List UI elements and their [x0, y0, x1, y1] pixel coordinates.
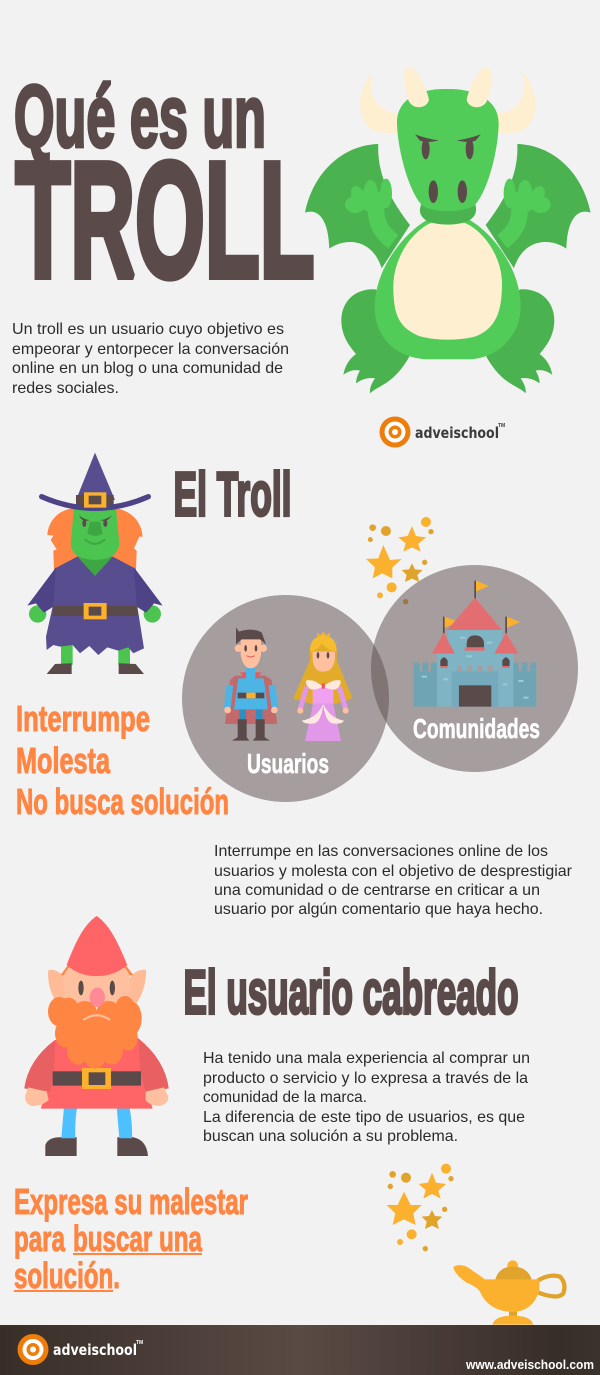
text block: angry user description [203, 1050, 530, 1145]
callout: angry user goal [14, 1181, 248, 1296]
footer [0, 1325, 600, 1375]
text block: troll description: Interrumpe en las conversaciones online de los [214, 843, 548, 860]
text block: intro: online en un blog o una comunidad de [12, 360, 283, 377]
label: Comunidades: Comunidades [413, 713, 540, 744]
text block: angry user description: Ha tenido una mala experiencia al comprar un [203, 1050, 530, 1067]
callout: angry user goal: buscar una [73, 1218, 203, 1259]
icon: gnome angry user [24, 916, 169, 1156]
logo: adveischool footer: adveischool [53, 1341, 137, 1359]
circle: usuarios [182, 595, 389, 802]
icon: prince [224, 627, 278, 741]
circle: comunidades [371, 565, 578, 772]
text block: angry user description: buscan una solución a su problema. [203, 1128, 458, 1145]
logo: adveischool footer [18, 1334, 143, 1365]
title: Qué es un [14, 66, 266, 166]
logo: adveischool top: adveischool [415, 424, 499, 442]
logo: adveischool footer: TM [136, 1340, 143, 1346]
logo: adveischool top: TM [498, 423, 505, 429]
logo: adveischool top [380, 416, 505, 448]
text block: troll description: una comunidad o de centrarse en criticar a un [214, 882, 540, 899]
label: Usuarios: Usuarios [247, 748, 329, 779]
text block: angry user description: producto o servicio y lo expresa a través de la [203, 1070, 528, 1087]
text block: troll description: usuario por algún comentario que haya hecho. [214, 901, 543, 918]
callout: angry user goal: solución. [14, 1255, 120, 1296]
text block: intro: empeorar y entorpecer la conversación [12, 341, 289, 358]
text block: troll description: usuarios y molesta con el objetivo de desprestigiar [214, 863, 573, 880]
icon: castle [414, 581, 536, 707]
callout: angry user goal: Expresa su malestar [14, 1181, 248, 1222]
list: troll traits: Molesta [16, 740, 111, 781]
icon: witch troll [27, 453, 163, 674]
list: troll traits: No busca solución [16, 781, 229, 822]
icon: stars group top [366, 517, 434, 604]
text block: intro [12, 321, 289, 397]
icon: dragon [305, 67, 591, 393]
heading: El Troll: El Troll [174, 460, 292, 530]
list: troll traits [16, 698, 229, 822]
text block: angry user description: La diferencia de este tipo de usuarios, es que [203, 1109, 525, 1126]
title [14, 66, 314, 312]
icon: princess [293, 632, 353, 741]
icon: genie lamp [453, 1260, 564, 1325]
text block: angry user description: comunidad de la marca. [203, 1089, 367, 1106]
list: troll traits: Interrumpe [16, 698, 150, 739]
text block: intro: redes sociales. [12, 380, 119, 397]
venn diagram: usuarios and comunidades [182, 565, 578, 802]
callout: angry user goal: para [14, 1218, 66, 1259]
text block: troll description [214, 843, 573, 918]
title: TROLL [16, 128, 314, 312]
icon: stars group bottom [387, 1164, 454, 1251]
text block: intro: Un troll es un usuario cuyo objetivo es [12, 321, 284, 338]
